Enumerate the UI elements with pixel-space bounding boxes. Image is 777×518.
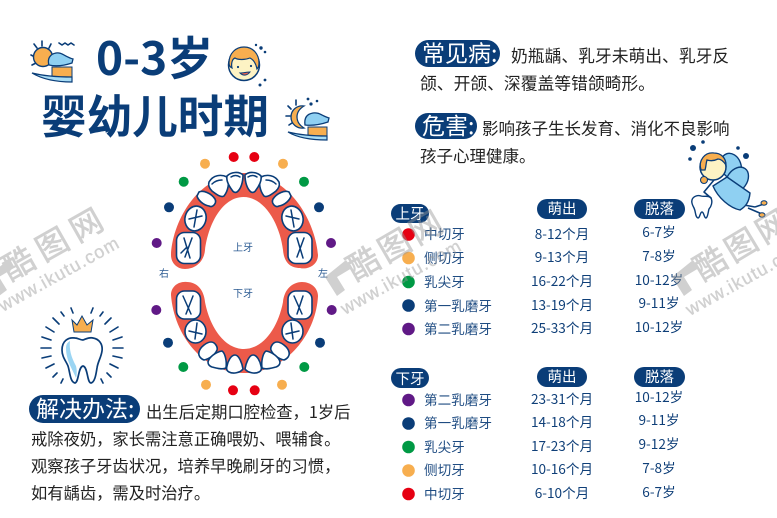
row: canine: 10-12岁 bbox=[635, 269, 683, 289]
table: upper teeth bbox=[391, 198, 685, 338]
text: solution: 戒除夜奶，家长需注意正确喂奶、喂辅食。 bbox=[31, 426, 340, 450]
header: shedding lower: 脱落 bbox=[645, 366, 674, 387]
row: central incisor lower: 6-7岁 bbox=[642, 481, 676, 501]
row: second molar: 25-33个月 bbox=[531, 317, 593, 337]
row: lateral incisor: 9-13个月 bbox=[535, 246, 589, 266]
row: first molar lower: 第一乳磨牙 bbox=[424, 412, 492, 432]
diagram labels bbox=[159, 239, 328, 300]
header: lower teeth: 下牙 bbox=[396, 368, 424, 389]
text: solution bbox=[31, 399, 350, 504]
header: shedding lower bbox=[634, 366, 685, 387]
panel: common diseases bbox=[415, 34, 729, 94]
row: canine lower: 9-12岁 bbox=[639, 433, 679, 453]
watermark bbox=[0, 192, 777, 320]
header: upper teeth: 上牙 bbox=[396, 203, 424, 224]
row: central incisor: 中切牙 bbox=[424, 223, 465, 243]
heading pill: harm: 危害: bbox=[422, 107, 474, 141]
row: first molar lower: 9-11岁 bbox=[639, 409, 679, 429]
text: harm: 影响孩子生长发育、消化不良影响 bbox=[482, 116, 730, 140]
row: central incisor: 8-12个月 bbox=[535, 223, 589, 243]
row: second molar: 第二乳磨牙 bbox=[424, 318, 492, 338]
text: solution: 如有龋齿，需及时治疗。 bbox=[31, 480, 210, 504]
row: lateral incisor: 7-8岁 bbox=[642, 245, 676, 265]
row: lateral incisor lower: 侧切牙 bbox=[424, 459, 465, 479]
diagram labels: 上牙 bbox=[233, 239, 253, 254]
text: common diseases: 颌、开颌、深覆盖等错颌畸形。 bbox=[420, 70, 655, 94]
lower tooth colour dots bbox=[151, 305, 337, 395]
icon: moon and toothbrush bbox=[286, 98, 329, 140]
heading pill: solution: 解决办法: bbox=[36, 390, 134, 424]
icon: tooth fairy bbox=[688, 140, 767, 218]
diagram labels: 左 bbox=[318, 265, 328, 280]
icon: child face bbox=[228, 44, 266, 86]
diagram labels: 右 bbox=[159, 265, 169, 280]
upper tooth colour dots bbox=[152, 152, 336, 248]
row: first molar: 第一乳磨牙 bbox=[424, 295, 492, 315]
header: shedding: 脱落 bbox=[645, 198, 674, 219]
row: first molar: 13-19个月 bbox=[531, 294, 593, 314]
row: canine lower: 17-23个月 bbox=[531, 435, 593, 455]
text: harm bbox=[420, 116, 730, 167]
header: eruption lower bbox=[537, 366, 587, 387]
row: lateral incisor: 侧切牙 bbox=[424, 247, 465, 267]
upper gum bbox=[171, 173, 318, 269]
row: second molar lower bbox=[402, 386, 683, 409]
diagram labels: 下牙 bbox=[233, 285, 253, 300]
lower teeth bbox=[176, 291, 312, 373]
text: harm: 孩子心理健康。 bbox=[420, 143, 536, 167]
title bbox=[41, 23, 269, 147]
row: canine lower: 乳尖牙 bbox=[424, 436, 465, 456]
row: second molar lower: 第二乳磨牙 bbox=[424, 389, 492, 409]
text: common diseases: 奶瓶龋、乳牙未萌出、乳牙反 bbox=[511, 43, 729, 67]
text: common diseases bbox=[420, 43, 729, 94]
row: first molar lower: 14-18个月 bbox=[531, 411, 593, 431]
row: central incisor lower: 中切牙 bbox=[424, 483, 465, 503]
upper teeth bbox=[176, 172, 312, 264]
header: shedding bbox=[634, 198, 685, 219]
row: central incisor: 6-7岁 bbox=[642, 221, 676, 241]
text: solution: 出生后定期口腔检查，1岁后 bbox=[146, 399, 350, 423]
row: second molar: 10-12岁 bbox=[635, 316, 683, 336]
row: first molar: 9-11岁 bbox=[639, 292, 679, 312]
row: canine: 16-22个月 bbox=[531, 270, 593, 290]
panel: harm bbox=[415, 107, 730, 167]
lower gum bbox=[171, 282, 318, 373]
row: lateral incisor lower: 10-16个月 bbox=[531, 458, 593, 478]
title: 0-3岁 bbox=[96, 23, 213, 89]
header: eruption lower: 萌出 bbox=[548, 366, 576, 387]
row: central incisor lower: 6-10个月 bbox=[535, 482, 589, 502]
header: eruption: 萌出 bbox=[548, 198, 576, 219]
row: central incisor lower bbox=[402, 481, 676, 503]
panel: solution bbox=[29, 390, 350, 504]
row: second molar lower: 23-31个月 bbox=[531, 388, 593, 408]
row: lateral incisor bbox=[402, 245, 676, 267]
row: canine: 乳尖牙 bbox=[424, 271, 465, 291]
row: first molar bbox=[402, 292, 679, 315]
row: first molar lower bbox=[402, 409, 679, 432]
row: canine lower bbox=[402, 433, 679, 456]
title: 婴幼儿时期 bbox=[41, 81, 269, 147]
watermark: 酷图网 bbox=[337, 196, 454, 290]
icon: crowned tooth bbox=[41, 308, 123, 383]
row: second molar lower: 10-12岁 bbox=[635, 386, 683, 406]
row: central incisor bbox=[402, 221, 676, 243]
diagram: teeth arch bbox=[151, 152, 337, 395]
icon: sun and toothbrush bbox=[31, 41, 74, 82]
watermark: www.ikutu.com bbox=[336, 236, 464, 319]
row: lateral incisor lower: 7-8岁 bbox=[642, 457, 676, 477]
table: lower teeth bbox=[391, 366, 685, 503]
row: second molar bbox=[402, 316, 683, 338]
row: lateral incisor lower bbox=[402, 457, 676, 479]
text: solution: 观察孩子牙齿状况，培养早晚刷牙的习惯， bbox=[31, 453, 340, 477]
row: canine bbox=[402, 269, 683, 291]
header: eruption bbox=[537, 198, 587, 219]
heading pill: common diseases: 常见病: bbox=[422, 34, 497, 68]
